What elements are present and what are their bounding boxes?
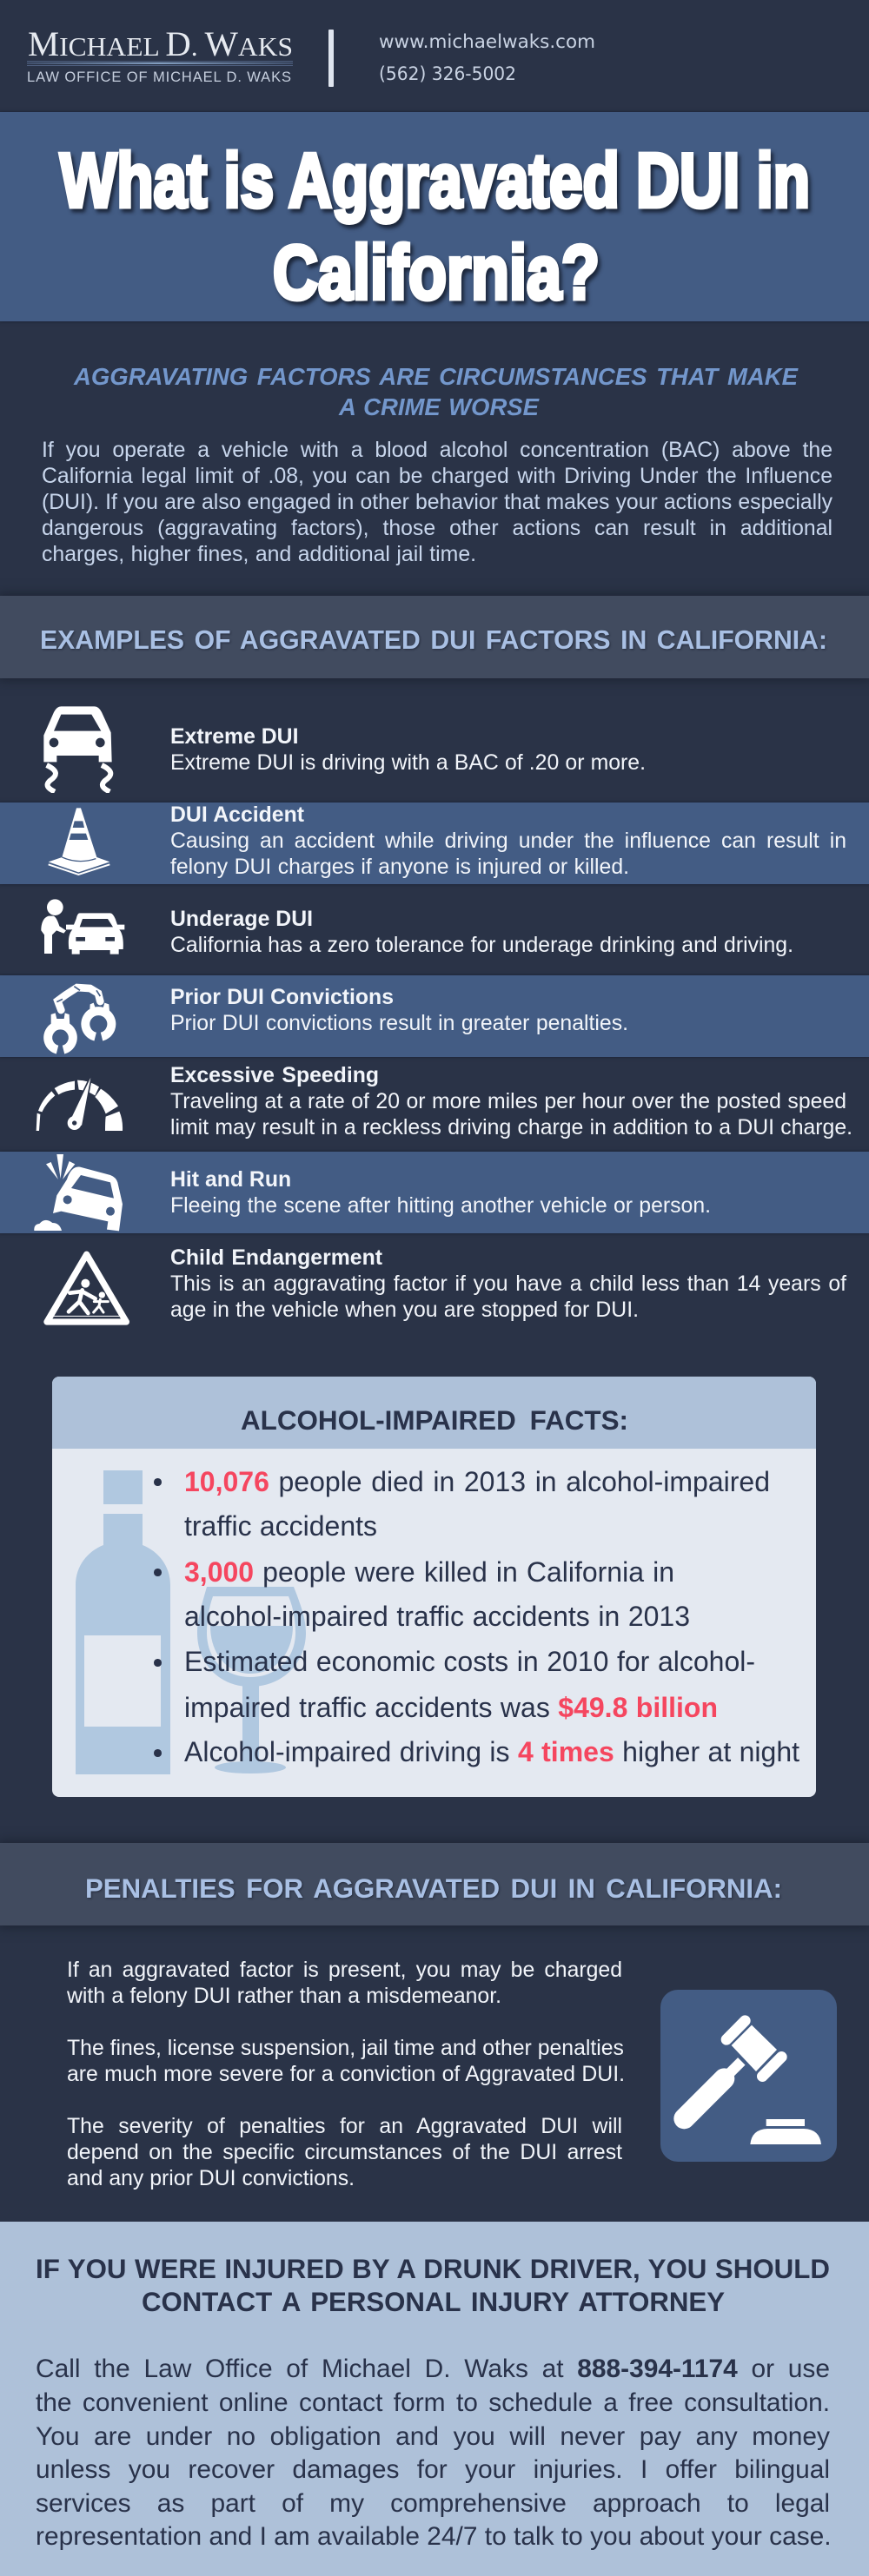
footer panel: contact an attorney xyxy=(0,2222,869,2576)
footer paragraph: unless you recover damages for your injuries. I offer bilingual xyxy=(36,2455,830,2484)
facts list: 3,000 people were killed in California in xyxy=(184,1556,674,1588)
logo: Michael D. Waks xyxy=(27,24,293,85)
facts list: impaired traffic accidents was $49.8 billion xyxy=(184,1692,718,1723)
factor: Prior DUI Convictions xyxy=(0,975,869,1057)
footer heading: CONTACT A PERSONAL INJURY ATTORNEY xyxy=(142,2287,725,2317)
factor: DUI Accident: Causing an accident while driving under the influence can result in xyxy=(170,829,846,853)
footer heading: IF YOU WERE INJURED BY A DRUNK DRIVER, YOU SHOULD xyxy=(36,2254,830,2284)
factor: Extreme DUI xyxy=(43,706,646,793)
intro section xyxy=(42,363,833,566)
facts list: alcohol-impaired traffic accidents in 2013 xyxy=(184,1601,690,1632)
header: logo and contact xyxy=(0,0,869,112)
factor: Underage DUI: California has a zero tolerance for underage drinking and driving. xyxy=(170,934,793,957)
contact details: www.michaelwaks.com xyxy=(379,31,595,52)
footer heading xyxy=(36,2254,830,2317)
footer paragraph: You are under no obligation and you will never pay any money xyxy=(36,2422,830,2451)
intro paragraph: dangerous (aggravating factors), those other actions can result in additional xyxy=(42,517,833,540)
icon: gavel card xyxy=(660,1990,837,2162)
logo: Michael D. Waks: MICHAEL D. WAKS xyxy=(28,24,293,63)
icon: child crossing sign xyxy=(43,1251,129,1325)
penalties text: The severity of penalties for an Aggravated DUI will xyxy=(67,2115,622,2138)
facts list: traffic accidents xyxy=(184,1510,377,1542)
section heading: examples: EXAMPLES OF AGGRAVATED DUI FACTORS IN CALIFORNIA: xyxy=(40,626,827,655)
factor: Excessive Speeding: Excessive Speeding xyxy=(170,1064,379,1087)
contact details: (562) 326-5002 xyxy=(379,63,516,84)
factor: Hit and Run: Fleeing the scene after hitting another vehicle or person. xyxy=(170,1194,711,1218)
footer paragraph: representation and I am available 24/7 to talk to you about your case. xyxy=(36,2522,832,2551)
penalties text: depend on the specific circumstances of the DUI arrest xyxy=(67,2141,622,2164)
facts header: ALCOHOL-IMPAIRED FACTS: xyxy=(241,1405,628,1436)
title xyxy=(57,137,813,315)
penalties text xyxy=(67,1958,625,2190)
footer paragraph: services as part of my comprehensive approach to legal xyxy=(36,2489,830,2518)
intro subheading xyxy=(73,363,799,420)
intro paragraph: California legal limit of .08, you can be charged with Driving Under the Influence xyxy=(42,465,833,488)
factor: Prior DUI Convictions: Prior DUI convictions result in greater penalties. xyxy=(170,1012,628,1035)
intro paragraph: charges, higher fines, and additional jail time. xyxy=(42,543,476,566)
facts list: 10,076 people died in 2013 in alcohol-impaired xyxy=(184,1466,770,1497)
factor: Excessive Speeding: Traveling at a rate of 20 or more miles per hour over the posted speed xyxy=(170,1090,846,1113)
section heading: penalties: PENALTIES FOR AGGRAVATED DUI IN CALIFORNIA: xyxy=(85,1873,782,1904)
icon: handcuffs xyxy=(43,983,116,1054)
facts list: Alcohol-impaired driving is 4 times higher at night xyxy=(184,1736,799,1767)
icon: speedometer xyxy=(36,1078,123,1131)
factor: DUI Accident xyxy=(0,803,869,884)
factor: Child Endangerment xyxy=(43,1246,846,1325)
factor: Child Endangerment: Child Endangerment xyxy=(170,1246,382,1270)
factor: Excessive Speeding: limit may result in a reckless driving charge in addition to a DUI charge. xyxy=(170,1116,852,1139)
penalties text: with a felony DUI rather than a misdemeanor. xyxy=(67,1985,501,2008)
factor: Underage DUI xyxy=(41,899,793,957)
contact details xyxy=(379,31,595,84)
logo: Michael D. Waks: LAW OFFICE OF MICHAEL D. WAKS xyxy=(27,69,291,85)
facts header xyxy=(52,1377,816,1449)
penalties text: If an aggravated factor is present, you may be charged xyxy=(67,1958,622,1982)
icon: traffic cone xyxy=(48,808,110,875)
factor: DUI Accident: DUI Accident xyxy=(170,803,304,827)
factor: DUI Accident: felony DUI charges if anyone is injured or killed. xyxy=(170,855,629,879)
section heading: penalties xyxy=(0,1843,869,1925)
factor: Prior DUI Convictions: Prior DUI Convictions xyxy=(170,986,394,1009)
factor: Child Endangerment: This is an aggravating factor if you have a child less than 14 years of xyxy=(170,1272,846,1296)
factor: Underage DUI: Underage DUI xyxy=(170,908,313,931)
factor: Extreme DUI: Extreme DUI is driving with a BAC of .20 or more. xyxy=(170,751,646,775)
footer paragraph: Call the Law Office of Michael D. Waks at 888-394-1174 or use xyxy=(36,2355,830,2383)
penalties text: are much more severe for a conviction of Aggravated DUI. xyxy=(67,2063,625,2086)
panel: alcohol-impaired facts xyxy=(52,1377,816,1797)
header divider xyxy=(328,30,334,87)
title band xyxy=(0,112,869,321)
intro subheading: AGGRAVATING FACTORS ARE CIRCUMSTANCES THAT MAKE xyxy=(74,363,798,390)
title: California? xyxy=(273,229,600,315)
facts list xyxy=(154,1466,799,1767)
facts list: Estimated economic costs in 2010 for alcohol- xyxy=(184,1646,755,1677)
section heading: examples xyxy=(0,596,869,678)
factor: Hit and Run: Hit and Run xyxy=(170,1168,291,1192)
factor: Child Endangerment: age in the vehicle when you are stopped for DUI. xyxy=(170,1298,639,1322)
penalties text: The fines, license suspension, jail time and other penalties xyxy=(67,2037,624,2060)
intro paragraph: If you operate a vehicle with a blood alcohol concentration (BAC) above the xyxy=(42,439,833,462)
penalties section xyxy=(67,1958,837,2190)
intro subheading: A CRIME WORSE xyxy=(339,393,539,420)
penalties text: and any prior DUI convictions. xyxy=(67,2167,355,2190)
factor: Extreme DUI: Extreme DUI xyxy=(170,725,298,749)
factor: Excessive Speeding xyxy=(36,1064,852,1139)
icon: car with skid marks xyxy=(43,706,113,793)
intro paragraph: (DUI). If you are also engaged in other behavior that makes your actions especially xyxy=(42,491,833,514)
footer paragraph xyxy=(36,2355,832,2551)
icon: car crash xyxy=(34,1154,123,1232)
intro paragraph xyxy=(42,439,833,566)
illustration: bottle and wine glass xyxy=(76,1470,306,1774)
footer paragraph: the convenient online contact form to schedule a free consultation. xyxy=(36,2388,830,2417)
icon: person beside car xyxy=(41,899,125,954)
factor: Hit and Run xyxy=(0,1152,869,1233)
